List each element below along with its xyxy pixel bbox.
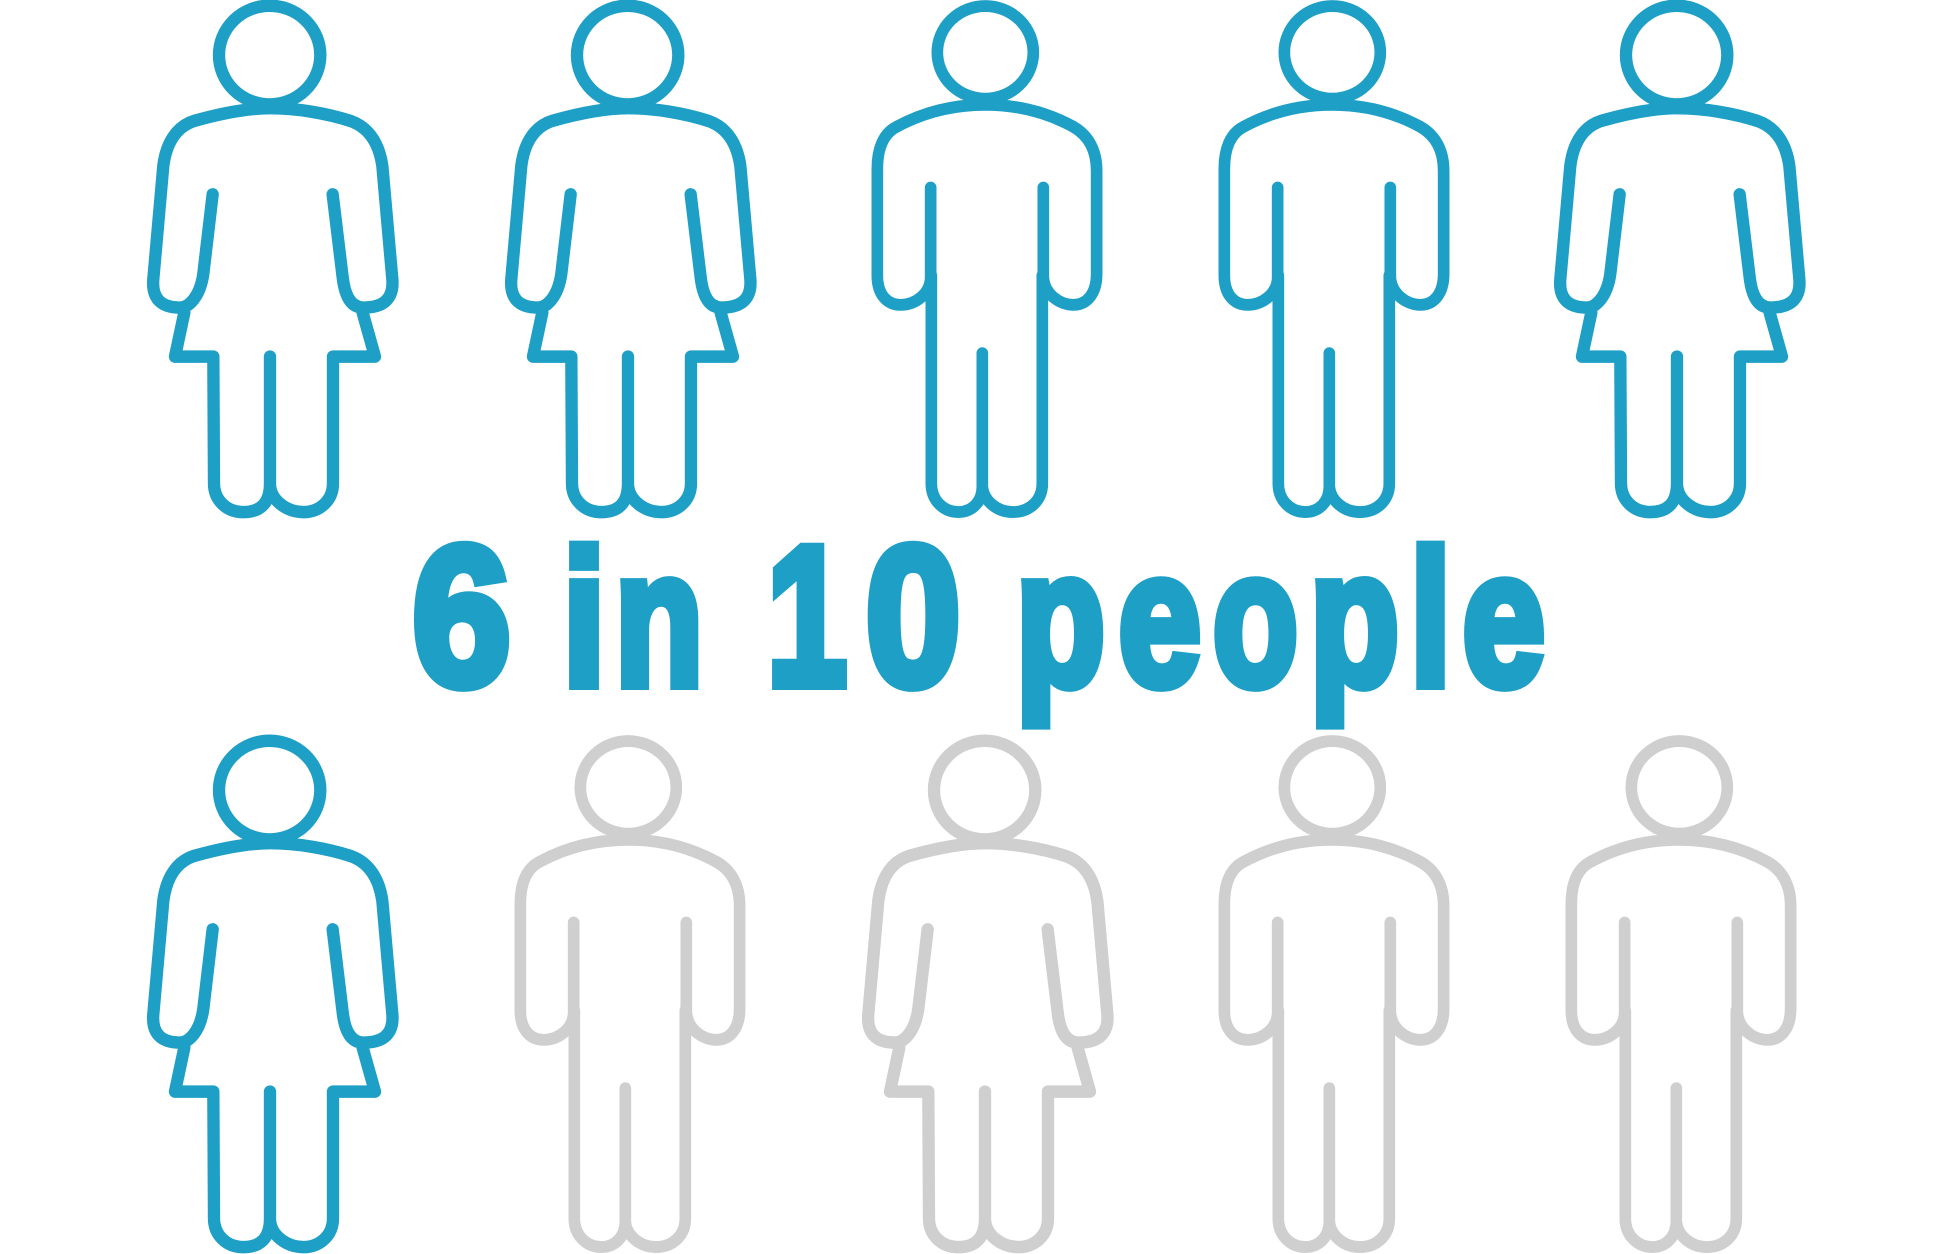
person 4: man, blue xyxy=(1224,6,1444,512)
title: 6 in 10 people: i xyxy=(563,512,605,726)
title: 6 in 10 people: e xyxy=(1463,512,1545,726)
title: 6 in 10 people: l xyxy=(1410,512,1451,726)
person 3: man, blue xyxy=(877,6,1097,512)
title: 6 in 10 people xyxy=(412,506,1545,726)
person 9: man, grey xyxy=(1224,741,1444,1247)
person 6: woman, blue xyxy=(153,741,393,1247)
person 10: man, grey xyxy=(1571,741,1791,1247)
title: 6 in 10 people: o xyxy=(1213,512,1298,726)
person 5: woman, blue xyxy=(1560,6,1800,512)
person 7: man, grey xyxy=(520,741,740,1247)
person 8: woman, grey xyxy=(868,741,1108,1247)
title: 6 in 10 people: 6 xyxy=(412,506,511,726)
title: 6 in 10 people: 0 xyxy=(866,506,961,726)
title: 6 in 10 people: p xyxy=(1016,512,1105,726)
title: 6 in 10 people: e xyxy=(1119,512,1201,726)
title: 6 in 10 people: n xyxy=(615,512,703,726)
title: 6 in 10 people: p xyxy=(1310,512,1399,726)
person 2: woman, blue xyxy=(511,6,751,512)
person 1: woman, blue xyxy=(153,6,393,512)
title: 6 in 10 people: 1 xyxy=(767,506,847,726)
